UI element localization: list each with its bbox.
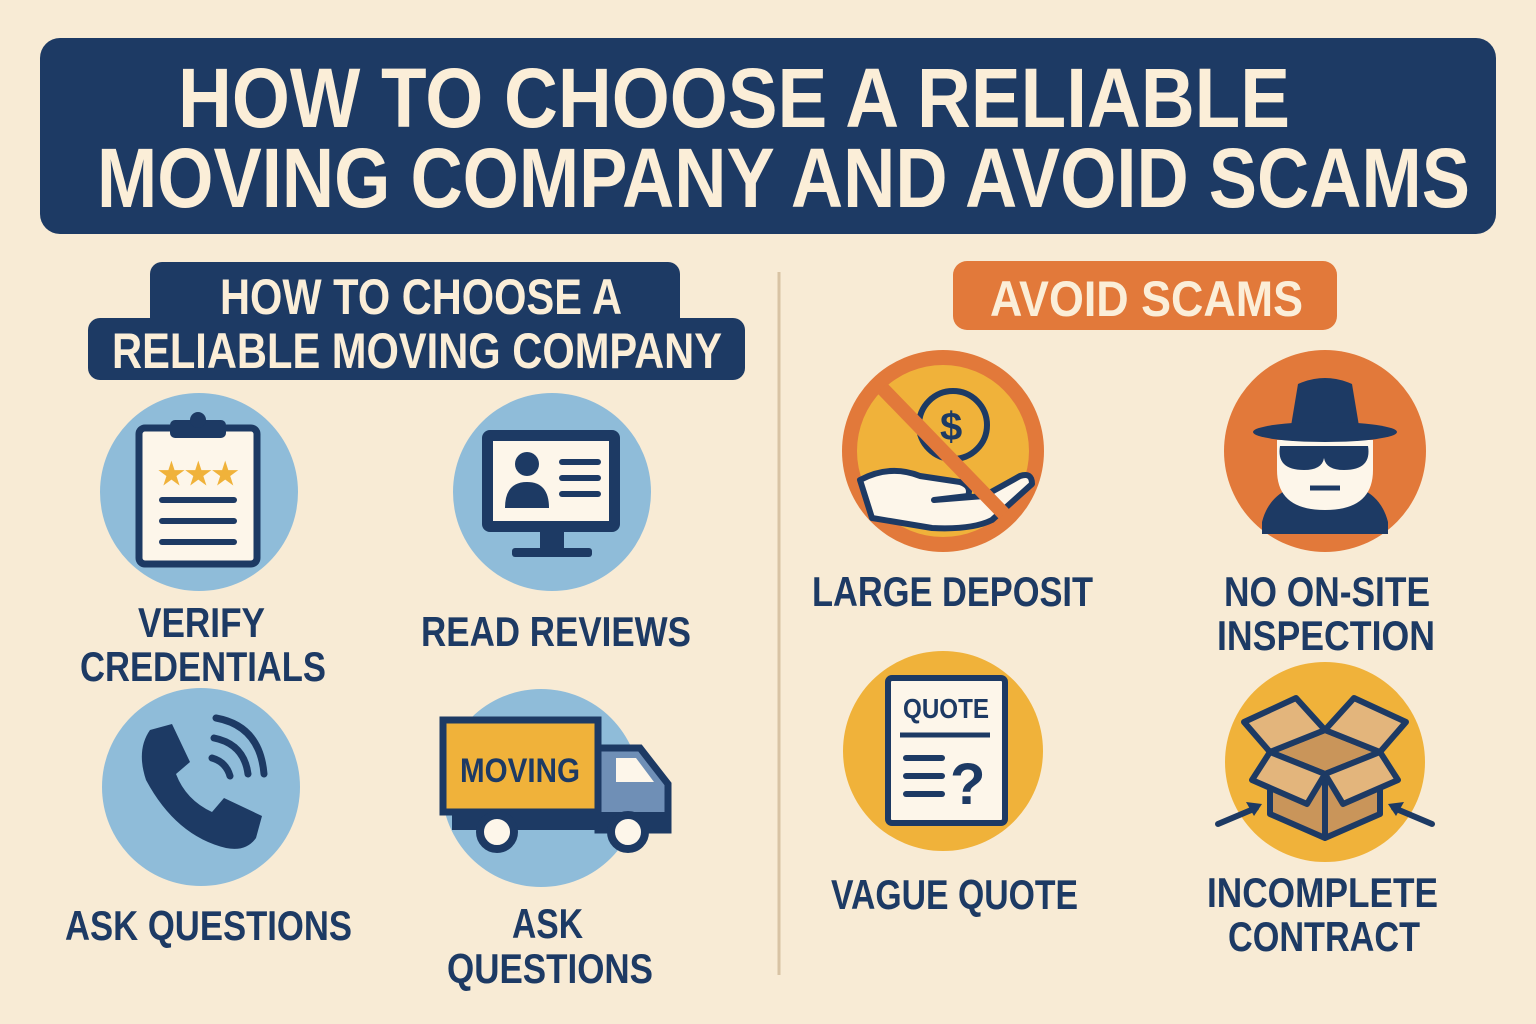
icon: quote: ? [950, 752, 985, 817]
icon: monitor [453, 393, 651, 591]
title banner: HOW TO CHOOSE A RELIABLE [178, 51, 1290, 145]
labels: QUESTIONS [447, 945, 653, 992]
title banner [40, 38, 1496, 234]
labels: CREDENTIALS [80, 643, 326, 690]
icon: large deposit: $ [940, 405, 962, 449]
icon: phone [102, 688, 300, 886]
labels: READ REVIEWS [421, 608, 691, 655]
icon: quote: QUOTE [903, 693, 989, 724]
icon: clipboard: ★★★ [158, 458, 239, 491]
labels: ASK QUESTIONS [65, 902, 352, 949]
icon: truck [442, 689, 668, 887]
icon: quote [843, 651, 1043, 851]
subheading: how to choose [88, 262, 745, 380]
subheading: how to choose: HOW TO CHOOSE A [220, 269, 622, 325]
labels: VERIFY [138, 599, 265, 646]
icon: large deposit [842, 350, 1044, 552]
labels: INSPECTION [1217, 612, 1435, 659]
icon: truck: MOVING [460, 752, 580, 790]
subheading: avoid scams: AVOID SCAMS [990, 271, 1303, 327]
labels: LARGE DEPOSIT [812, 568, 1093, 615]
labels: INCOMPLETE [1207, 869, 1438, 916]
labels [65, 568, 1438, 992]
icon: box [1218, 662, 1432, 862]
labels: NO ON-SITE [1224, 568, 1430, 615]
labels: CONTRACT [1228, 913, 1420, 960]
labels: VAGUE QUOTE [831, 871, 1078, 918]
icon: spy [1224, 350, 1426, 552]
subheading: how to choose: RELIABLE MOVING COMPANY [112, 323, 722, 379]
labels: ASK [512, 900, 583, 947]
icon: clipboard [100, 393, 298, 591]
